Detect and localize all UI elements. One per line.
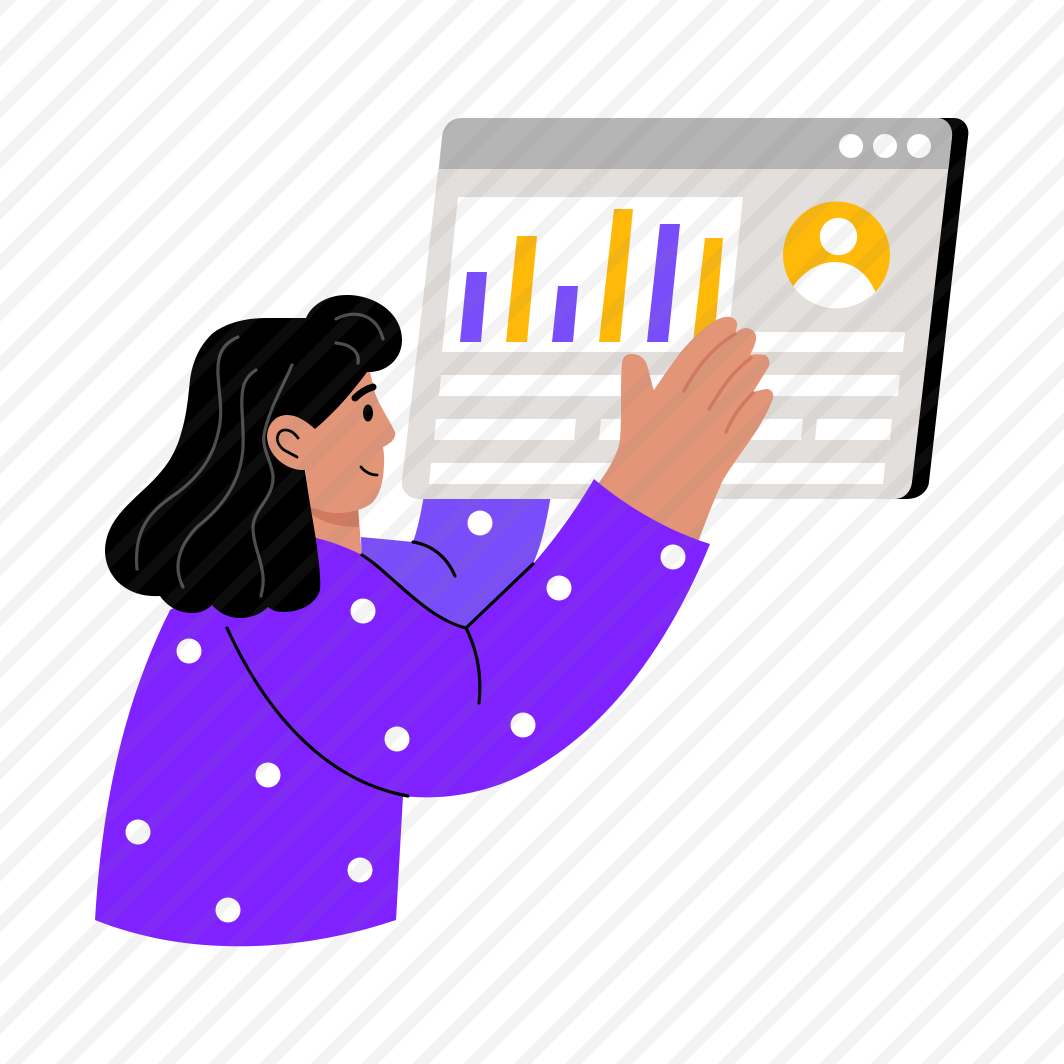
window body [402, 118, 952, 499]
hair [105, 295, 402, 618]
polka dots [126, 544, 686, 922]
finger creases [684, 334, 753, 432]
eyebrow [355, 387, 373, 398]
neck [305, 495, 362, 560]
text rows [429, 375, 900, 484]
neck shadow [306, 505, 359, 527]
window control dots [839, 134, 931, 158]
eye [363, 404, 373, 422]
sweater [95, 479, 710, 946]
avatar icon [783, 202, 890, 308]
window title bar [439, 118, 952, 169]
far sleeve [361, 495, 551, 650]
smile [361, 467, 377, 475]
bar chart [442, 197, 905, 352]
face [300, 365, 395, 513]
ear [267, 415, 320, 470]
browser window [402, 118, 968, 499]
window shadow edge [460, 118, 968, 499]
hair strands [137, 314, 383, 596]
hand [590, 317, 773, 545]
inner ear line [277, 430, 298, 457]
sweater seams [227, 555, 533, 796]
